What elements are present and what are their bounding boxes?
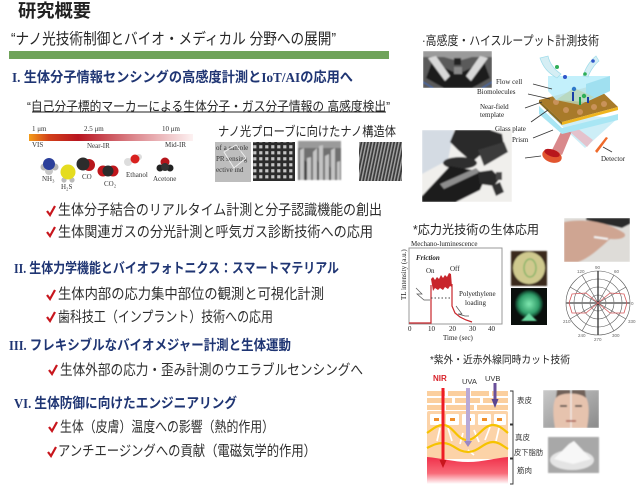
chart: polar plot: 120 xyxy=(577,269,585,274)
chart: polar plot: 270 xyxy=(594,337,602,342)
brackets and skin layer labels: 表皮 xyxy=(517,395,532,405)
photo: instrument stage xyxy=(422,130,512,202)
prism and beams xyxy=(548,113,618,155)
icons: gas molecules xyxy=(40,154,176,191)
section VI bullet 1: 生体（皮膚）温度への影響（熱的作用） xyxy=(60,419,274,436)
chart: mechano-luminescence time trace: Time (sec) xyxy=(443,334,474,342)
chart: mechano-luminescence time trace: 10 xyxy=(428,325,436,333)
photo: green luminescence xyxy=(511,288,547,325)
chart: gas absorption spectrum bar: Near-IR xyxy=(87,142,110,150)
photo: glowing ring xyxy=(511,251,547,286)
diagram: skin cross-section xyxy=(427,391,508,484)
section II bullet 1: 生体内部の応力集中部位の観測と可視化計測 xyxy=(58,286,324,303)
brackets and skin layer labels: 皮下脂肪 xyxy=(514,448,543,457)
image: printed text sample: PR sensing xyxy=(216,155,248,163)
icon: acetone: Acetone xyxy=(153,175,176,183)
arrow: UVA xyxy=(462,377,477,447)
chart: mechano-luminescence time trace: Off xyxy=(450,265,460,273)
title: 研究概要 xyxy=(18,1,91,21)
chart: polar plot: 300 xyxy=(612,333,620,338)
brackets and skin layer labels xyxy=(510,391,543,484)
arrow: UVB: UVB xyxy=(485,374,500,383)
nano structure heading: ナノ光プローブに向けたナノ構造体 xyxy=(218,124,396,139)
chart: gas absorption spectrum bar xyxy=(29,125,193,150)
chart: polar plot: 90 xyxy=(595,265,601,270)
section VI bullet 2: アンチエージングへの貢献（電磁気学的作用） xyxy=(58,443,316,460)
brackets and skin layer labels: 真皮 xyxy=(515,432,530,442)
image: printed text sample: ective ind xyxy=(216,166,244,174)
chart: mechano-luminescence time trace: 20 xyxy=(449,325,456,333)
panel heading: *応力光技術の生体応用 xyxy=(413,222,539,237)
panel: UV/NIR cut technology xyxy=(427,353,599,484)
icon: light source xyxy=(540,147,564,165)
chart: mechano-luminescence time trace: 30 xyxy=(469,325,476,333)
labels: optics diagram: Flow cell xyxy=(496,78,522,86)
photo: instrument top view xyxy=(423,51,492,88)
section VI heading: VI. 生体防御に向けたエンジニアリング xyxy=(14,395,237,412)
labels: optics diagram xyxy=(477,78,626,163)
photo: white powder xyxy=(548,437,599,473)
brackets and skin layer labels: 筋肉 xyxy=(517,465,532,475)
chart: polar plot: 210 xyxy=(563,319,571,324)
chart: polar plot xyxy=(563,265,636,342)
chart: mechano-luminescence time trace: Friction xyxy=(416,254,440,262)
labels: optics diagram: template xyxy=(480,111,504,119)
chart: gas absorption spectrum bar: 2.5 μm xyxy=(84,125,104,133)
chart: mechano-luminescence time trace xyxy=(400,240,502,342)
chart: mechano-luminescence time trace: Polyethylene xyxy=(459,290,496,298)
chart: gas absorption spectrum bar: VIS xyxy=(32,141,43,149)
images: nano structures xyxy=(215,141,402,182)
section I heading: I. 生体分子情報センシングの高感度計測とIoT/AIの応用へ xyxy=(12,69,353,86)
glass plate xyxy=(539,106,618,134)
arrows: optics diagram leader lines xyxy=(525,84,612,158)
image: nanopillars xyxy=(298,141,341,180)
chart: mechano-luminescence time trace: On xyxy=(426,267,435,275)
arrow: NIR xyxy=(433,374,447,468)
section I quote: “自己分子標的マーカーによる生体分子・ガス分子情報の 高感度検出” xyxy=(27,99,390,114)
section III bullet: 生体外部の応力・歪み計測のウエラブルセンシングへ xyxy=(60,361,363,379)
gold near-field template xyxy=(539,85,618,125)
image: line grating xyxy=(359,142,402,181)
subtitle: “ナノ光技術制御とバイオ・メディカル 分野への展開” xyxy=(11,29,336,48)
arrow: UVB xyxy=(485,374,500,408)
flow cell xyxy=(548,76,610,105)
icon: ethanol: Ethanol xyxy=(126,171,148,179)
chart: polar plot: 60 xyxy=(614,269,620,274)
tubes xyxy=(540,56,599,78)
section I bullet 1: 生体分子結合のリアルタイム計測と分子認識機能の創出 xyxy=(58,202,382,219)
section II heading: II. 生体力学機能とバイオフォトニクス：スマートマテリアル xyxy=(14,260,339,277)
image: printed text sample xyxy=(215,142,251,182)
icon: detector xyxy=(595,137,608,153)
panel: high-throughput measurement xyxy=(422,33,626,202)
diagram: flow cell optics xyxy=(477,56,626,165)
image: square lattice xyxy=(253,142,295,181)
labels: optics diagram: Near-field xyxy=(480,103,509,111)
chart: mechano-luminescence time trace: 40 xyxy=(488,325,496,333)
chart: polar plot: 330 xyxy=(628,319,636,324)
chart: mechano-luminescence time trace: TL intensity (a.u.) xyxy=(400,249,408,300)
chart: mechano-luminescence time trace: Mechano-luminescence xyxy=(411,240,477,248)
section I bullet 2: 生体関連ガスの分光計測と呼気ガス診断技術への応用 xyxy=(58,224,373,241)
chart: polar plot: 240 xyxy=(578,333,586,338)
chart: polar plot: 0 xyxy=(631,301,634,306)
photo: hand with sensor xyxy=(564,218,630,262)
chart: mechano-luminescence time trace: 0 xyxy=(408,325,412,333)
section II bullet 2: 歯科技工（インプラント）技術への応用 xyxy=(58,309,273,326)
chart: gas absorption spectrum bar: 1 μm xyxy=(32,125,47,133)
labels: optics diagram: Glass plate xyxy=(495,125,526,133)
chart: mechano-luminescence time trace: loading xyxy=(465,299,486,307)
green divider bar xyxy=(9,51,389,59)
panel heading: ·高感度・ハイスループット計測技術 xyxy=(422,33,599,48)
section III heading: III. フレキシブルなバイオメジャー計測と生体運動 xyxy=(9,337,291,354)
panel heading: *紫外・近赤外線同時カット技術 xyxy=(430,353,570,366)
labels: optics diagram: Prism xyxy=(512,136,529,144)
labels: optics diagram: Detector xyxy=(601,155,626,163)
arrow: NIR: NIR xyxy=(433,374,447,383)
labels: optics diagram: Biomolecules xyxy=(477,88,516,96)
photo: face comparison xyxy=(543,390,599,428)
image: printed text sample: of a sample xyxy=(216,144,248,152)
chart: gas absorption spectrum bar: Mid-IR xyxy=(165,141,186,149)
biomolecules xyxy=(555,59,595,105)
icon: CO: CO xyxy=(82,173,92,181)
icon: H2S: H₂S xyxy=(61,183,72,191)
panel: mechanoluminescence xyxy=(400,218,636,342)
icon: CO2: CO₂ xyxy=(104,180,117,188)
icon: NH3: NH₃ xyxy=(42,175,55,183)
arrow: UVA: UVA xyxy=(462,377,477,386)
chart: gas absorption spectrum bar: 10 μm xyxy=(162,125,181,133)
